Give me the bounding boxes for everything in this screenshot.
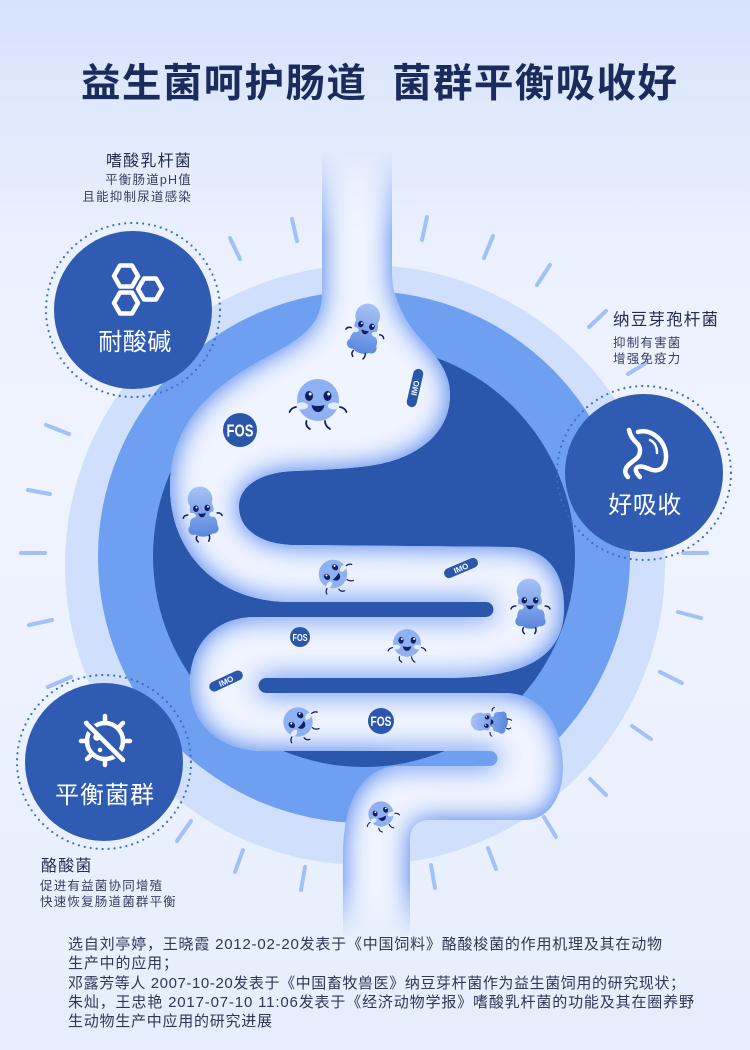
bacterium: peanut on its side — [470, 706, 513, 738]
badge label: 平衡菌群 — [55, 782, 155, 809]
text block: butyric acid bacteria: 促进有益菌协同增殖 — [40, 878, 163, 893]
IMO pill upper — [406, 368, 424, 408]
IMO pill upper: IMO — [409, 380, 422, 396]
FOS token large: FOS — [226, 420, 254, 440]
text block: lactobacillus: 嗜酸乳杆菌 — [106, 152, 192, 170]
badge disc — [565, 394, 723, 552]
panel: good absorption — [557, 386, 731, 560]
badge label: 好吸收 — [608, 492, 682, 519]
FOS token large — [223, 413, 257, 447]
bacterium: round tumbling upper band — [310, 550, 361, 602]
text block: butyric acid bacteria: 酪酸菌 — [41, 857, 93, 875]
badge disc — [54, 231, 212, 389]
text block: bacillus natto: 抑制有害菌 — [613, 335, 682, 350]
dotted ring — [557, 386, 731, 560]
text block: bacillus natto — [613, 310, 719, 366]
panel: balanced flora — [17, 675, 191, 849]
bacterium: round middle band — [388, 629, 426, 662]
text block: references: 邓露芳等人 2007-10-20发表于《中国畜牧兽医》纳豆芽杆菌作为益生菌饲用的研究现状； — [68, 974, 685, 992]
icon: crossed-out germ — [81, 716, 130, 765]
FOS token small — [290, 627, 310, 647]
text block: butyric acid bacteria — [40, 857, 177, 909]
text block: references: 朱灿，王忠艳 2017-07-10 11:06发表于《经济动物学报》嗜酸乳杆菌的功能及其在圈养野 — [68, 994, 694, 1011]
text block: butyric acid bacteria: 快速恢复肠道菌群平衡 — [40, 895, 177, 909]
text block: references: 生动物生产中应用的研究进展 — [68, 1012, 272, 1030]
panel: acid and alkali resistance — [46, 223, 220, 397]
bacterium: large round — [290, 379, 346, 429]
text block: references: 选自刘亭婷，王晓霞 2012-02-20发表于《中国饲料》酪酸梭菌的作用机理及其在动物 — [68, 935, 662, 953]
concentric circles backdrop — [65, 265, 665, 865]
icon: stomach — [625, 430, 666, 477]
text block: bacillus natto: 增强免疫力 — [613, 351, 682, 366]
dotted ring — [46, 223, 220, 397]
IMO pill right: IMO — [452, 561, 470, 576]
badge label: 耐酸碱 — [98, 329, 172, 356]
FOS token small: FOS — [292, 632, 308, 644]
text block: references — [68, 935, 694, 1030]
text block: lactobacillus — [82, 152, 192, 204]
dotted ring — [17, 675, 191, 849]
bacterium: round tumbling lower band — [274, 697, 326, 750]
text block: lactobacillus: 且能抑制尿道感染 — [82, 189, 192, 204]
FOS token medium: FOS — [370, 713, 392, 729]
bacteria and prebiotic tokens in the tube — [181, 300, 550, 836]
radiating tick marks — [21, 217, 707, 890]
FOS token medium — [368, 708, 394, 734]
bacterium: left peanut — [181, 485, 224, 543]
bacterium: round in the exit pipe — [361, 796, 403, 836]
bacterium: right peanut — [511, 578, 550, 634]
bacterium: top peanut — [340, 300, 391, 363]
IMO pill left: IMO — [217, 674, 235, 689]
badge disc — [25, 683, 183, 841]
IMO pill left — [208, 669, 244, 693]
IMO pill right — [442, 556, 480, 580]
intestine tube — [170, 158, 564, 930]
text block: bacillus natto: 纳豆芽孢杆菌 — [613, 310, 719, 329]
text block: references: 生产中的应用； — [68, 954, 178, 972]
title: 益生菌呵护肠道 菌群平衡吸收好 — [81, 62, 678, 106]
text block: lactobacillus: 平衡肠道pH值 — [105, 172, 192, 187]
icon: hexagons — [114, 266, 162, 314]
